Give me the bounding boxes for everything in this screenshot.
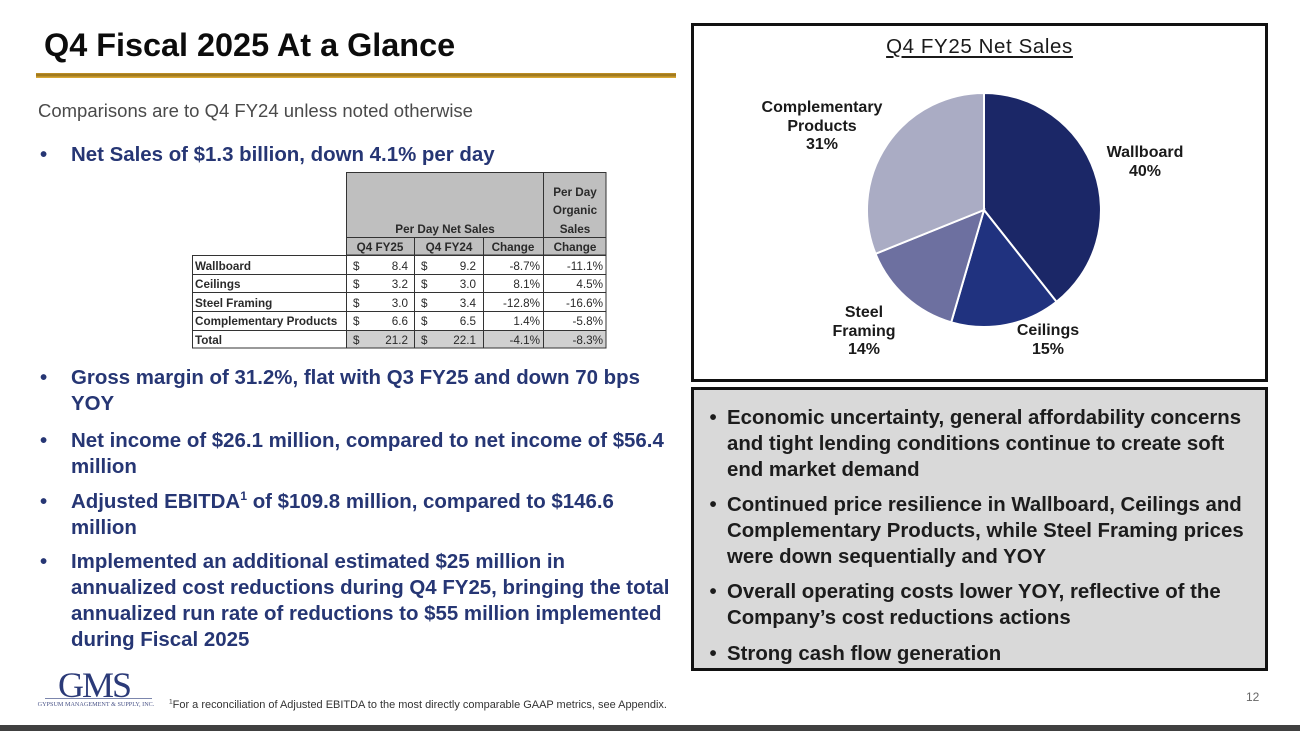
bullet: net income: Net income of $26.1 million, compared to net income of $56.4 bbox=[71, 429, 664, 452]
table: per day net sales: 6.6 bbox=[392, 315, 408, 328]
table: per day net sales: $ bbox=[353, 315, 360, 328]
table: per day net sales: -8.7% bbox=[509, 260, 540, 273]
bullet: operating costs: Company’s cost reductions actions bbox=[727, 607, 1071, 629]
table: per day net sales: $ bbox=[353, 260, 360, 273]
bullet: economic uncertainty: • bbox=[710, 407, 717, 429]
table: per day net sales: -11.1% bbox=[567, 260, 603, 273]
table: per day net sales: Per Day Net Sales bbox=[395, 223, 495, 236]
table: per day net sales: 22.1 bbox=[453, 334, 476, 347]
panel: commentary bbox=[691, 387, 1268, 671]
bullet: gross margin: YOY bbox=[71, 392, 114, 415]
table: per day net sales: Sales bbox=[560, 223, 591, 236]
bullet: cost reductions: during Fiscal 2025 bbox=[71, 628, 249, 651]
table: per day net sales: $ bbox=[353, 278, 360, 291]
bullet: operating costs: Overall operating costs lower YOY, reflective of the bbox=[727, 581, 1221, 603]
label: steel framing: Framing bbox=[832, 322, 896, 340]
title gold rule bbox=[36, 73, 676, 78]
bullet: cost reductions: • bbox=[40, 550, 47, 573]
bullet: cost reductions: Implemented an additional estimated $25 million in bbox=[71, 550, 565, 573]
table: per day net sales: 3.0 bbox=[460, 278, 476, 291]
label: steel framing: 14% bbox=[848, 341, 880, 358]
table: per day net sales: 3.0 bbox=[392, 297, 408, 310]
label: complementary products: Complementary bbox=[762, 99, 882, 116]
table: per day net sales: $ bbox=[421, 334, 428, 347]
label: ceilings: Ceilings bbox=[1017, 322, 1079, 339]
label: ceilings bbox=[1017, 322, 1079, 358]
table: per day net sales: $ bbox=[353, 297, 360, 310]
page number: 12 bbox=[1246, 690, 1259, 704]
table: per day net sales: 1.4% bbox=[513, 315, 540, 328]
table: per day net sales: 9.2 bbox=[460, 260, 476, 273]
table: per day net sales: 3.2 bbox=[392, 278, 408, 291]
table: per day net sales: -16.6% bbox=[566, 297, 603, 310]
bullet: price resilience: were down sequentially and YOY bbox=[727, 546, 1046, 568]
table: per day net sales: -8.3% bbox=[572, 334, 603, 347]
table: per day net sales: Change bbox=[492, 241, 535, 254]
title: Q4 Fiscal 2025 At a Glance bbox=[44, 27, 455, 63]
table: per day net sales: 4.5% bbox=[576, 278, 603, 291]
table: per day net sales: Steel Framing bbox=[195, 297, 272, 310]
table: per day net sales: 8.1% bbox=[513, 278, 540, 291]
bullet: net sales: Net Sales of $1.3 billion, down 4.1% per day bbox=[71, 143, 495, 166]
label: wallboard: 40% bbox=[1129, 162, 1161, 180]
table: per day net sales: $ bbox=[353, 334, 360, 347]
bullet: cash flow: • bbox=[710, 643, 717, 665]
label: wallboard: Wallboard bbox=[1107, 144, 1183, 161]
comparison note: Comparisons are to Q4 FY24 unless noted otherwise bbox=[38, 100, 473, 121]
bullet: gross margin: • bbox=[40, 366, 47, 389]
chart title: Q4 FY25 Net Sales bbox=[886, 35, 1073, 58]
label: ceilings: 15% bbox=[1032, 340, 1064, 358]
table: per day net sales: -4.1% bbox=[509, 334, 540, 347]
bullet: net income bbox=[40, 429, 664, 478]
footer bar bbox=[0, 725, 1300, 731]
logo: GMS bbox=[38, 665, 154, 708]
panel: net sales pie chart bbox=[691, 23, 1268, 382]
label: wallboard bbox=[1106, 144, 1183, 180]
table: per day net sales: -5.8% bbox=[572, 315, 603, 328]
pie chart bbox=[868, 94, 1100, 326]
bullet: adjusted EBITDA: Adjusted EBITDA1 of $109.8 million, compared to $146.6 bbox=[71, 489, 614, 513]
table: per day net sales: 3.4 bbox=[460, 297, 476, 310]
bullet: economic uncertainty: and tight lending conditions continue to create soft bbox=[727, 433, 1224, 455]
table: per day net sales: 21.2 bbox=[385, 334, 408, 347]
table: per day net sales: $ bbox=[421, 260, 428, 273]
table: per day net sales: Q4 FY25 bbox=[357, 241, 404, 254]
bullet: net income: million bbox=[71, 455, 137, 478]
bullet: cost reductions: annualized run rate of reductions to $55 million implemented bbox=[71, 602, 662, 625]
logo: GMS: GMS bbox=[58, 665, 130, 705]
logo: GMS: GYPSUM MANAGEMENT & SUPPLY, INC. bbox=[38, 701, 154, 708]
bullet: economic uncertainty: Economic uncertainty, general affordability concerns bbox=[727, 407, 1241, 429]
table: per day net sales: Wallboard bbox=[195, 260, 251, 273]
bullet: economic uncertainty bbox=[710, 407, 1241, 481]
bullet: gross margin bbox=[40, 366, 640, 415]
bullet: price resilience bbox=[710, 494, 1244, 568]
table: per day net sales: 6.5 bbox=[460, 315, 476, 328]
table: per day net sales: Organic bbox=[553, 204, 598, 217]
label: steel framing bbox=[832, 304, 896, 358]
label: complementary products: 31% bbox=[806, 136, 838, 153]
label: complementary products: Products bbox=[787, 118, 857, 134]
table: per day net sales: Per Day bbox=[553, 186, 597, 199]
bullet: adjusted EBITDA: • bbox=[40, 490, 47, 513]
table: per day net sales bbox=[192, 172, 606, 348]
table: per day net sales: $ bbox=[421, 278, 428, 291]
table: per day net sales: Total bbox=[195, 334, 222, 347]
bullet: net sales: • bbox=[40, 143, 47, 166]
bullet: price resilience: • bbox=[710, 494, 717, 516]
bullet: operating costs: • bbox=[710, 581, 717, 603]
label: complementary products bbox=[762, 99, 882, 153]
bullet: adjusted EBITDA: million bbox=[71, 516, 137, 539]
bullet: net income: • bbox=[40, 429, 47, 452]
bullet: cost reductions: annualized cost reductions during Q4 FY25, bringing the total bbox=[71, 576, 669, 599]
bullet: operating costs bbox=[710, 581, 1221, 629]
bullet: price resilience: Complementary Products, while Steel Framing prices bbox=[727, 520, 1244, 542]
bullet: adjusted EBITDA bbox=[40, 489, 614, 539]
label: steel framing: Steel bbox=[845, 304, 883, 321]
table: per day net sales: -12.8% bbox=[503, 297, 540, 310]
table: per day net sales: Change bbox=[554, 241, 597, 254]
bullet: cost reductions bbox=[40, 550, 669, 651]
table: per day net sales: Complementary Products bbox=[195, 315, 338, 328]
table: per day net sales: $ bbox=[421, 297, 428, 310]
bullet: cash flow: Strong cash flow generation bbox=[727, 643, 1001, 665]
table: per day net sales: 8.4 bbox=[392, 260, 408, 273]
table: per day net sales: $ bbox=[421, 315, 428, 328]
table: per day net sales: Q4 FY24 bbox=[426, 241, 473, 254]
footnote: 1For a reconciliation of Adjusted EBITDA to the most directly comparable GAAP metrics, see Appendix. bbox=[169, 698, 667, 711]
bullet: economic uncertainty: end market demand bbox=[727, 459, 920, 481]
bullet: price resilience: Continued price resilience in Wallboard, Ceilings and bbox=[727, 494, 1242, 516]
table: per day net sales: Ceilings bbox=[195, 278, 241, 291]
bullet: gross margin: Gross margin of 31.2%, flat with Q3 FY25 and down 70 bps bbox=[71, 366, 640, 389]
